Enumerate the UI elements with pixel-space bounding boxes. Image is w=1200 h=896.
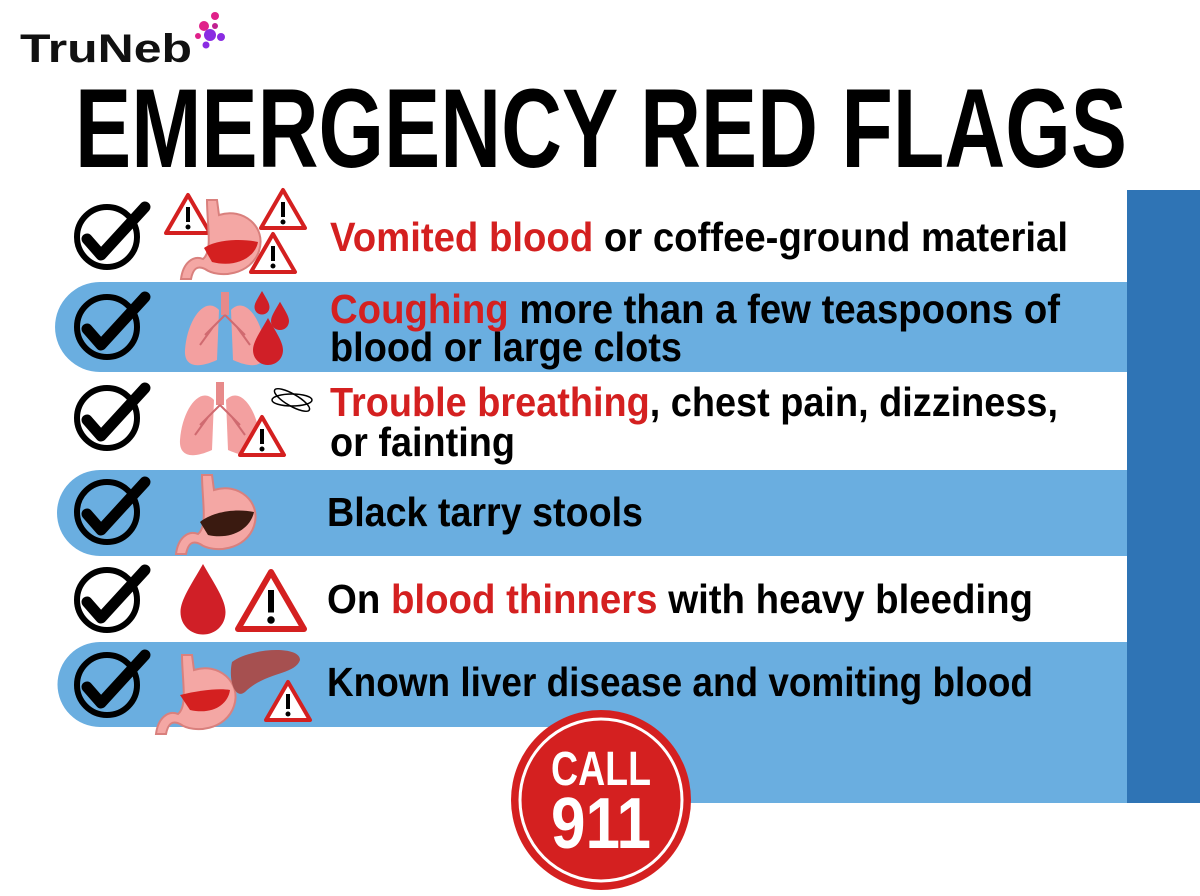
row 2: Coughing more than a few teaspoons of [330,286,1060,332]
row 6 [77,650,1033,734]
logo [20,12,225,71]
row 1 [77,190,1068,279]
row 4: Black tarry stools [327,489,643,535]
call 911 badge [511,710,691,890]
row 3: Trouble breathing, chest pain, dizziness, [330,379,1058,425]
row 5 [77,564,1033,634]
row 3 [77,379,1058,465]
row 2 [77,286,1060,370]
right dark bar [1127,190,1200,803]
call 911 badge: CALL [551,743,651,796]
row 2: blood or large clots [330,324,682,370]
blue background block [55,282,1127,803]
row 1: Vomited blood or coffee-ground material [330,214,1068,260]
row 5: On blood thinners with heavy bleeding [327,576,1033,622]
row 6: Known liver disease and vomiting blood [327,659,1033,705]
call 911 badge: 911 [551,784,651,864]
row 4 [77,475,643,554]
row 3: or fainting [330,419,515,465]
logo: TruNeb [20,27,192,71]
